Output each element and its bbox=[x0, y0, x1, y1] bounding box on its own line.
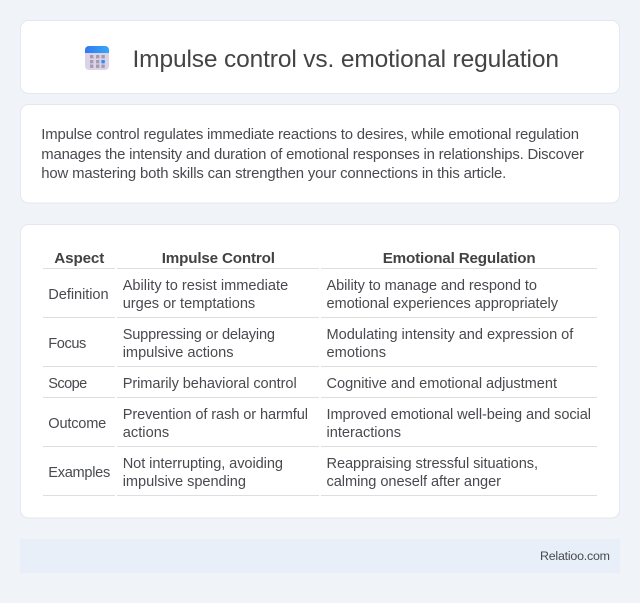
table row: definition: Ability to manage and respond to bbox=[326, 278, 537, 294]
table row: definition: Ability to resist immediate bbox=[123, 278, 288, 294]
table row: outcome: actions bbox=[123, 425, 169, 441]
table row: examples: Examples bbox=[48, 465, 110, 481]
footer bbox=[20, 539, 620, 573]
table row: examples: Not interrupting, avoiding bbox=[123, 456, 283, 472]
footer text: Relatioo.com bbox=[540, 549, 610, 563]
panel: title card bbox=[20, 20, 620, 94]
icon: calendar bbox=[85, 46, 109, 70]
text block: introduction: how mastering both skills can strengthen your connections in this article. bbox=[41, 166, 506, 182]
table row: scope bbox=[48, 376, 557, 392]
table row: definition bbox=[48, 278, 559, 312]
table header: Aspect bbox=[54, 250, 104, 267]
title: Impulse control vs. emotional regulation bbox=[132, 46, 559, 73]
table row: focus: Focus bbox=[48, 336, 86, 352]
table row: outcome: interactions bbox=[326, 425, 401, 441]
text block: introduction: Impulse control regulates immediate reactions to desires, while emotional regulation bbox=[41, 127, 579, 143]
table row: scope: Scope bbox=[48, 376, 87, 392]
table row: focus: Modulating intensity and expression of bbox=[326, 327, 574, 343]
table header bbox=[54, 250, 536, 267]
table row: examples bbox=[48, 456, 538, 490]
table row: outcome bbox=[48, 407, 591, 441]
table header: Emotional Regulation bbox=[383, 250, 536, 267]
text block: introduction bbox=[41, 127, 584, 182]
table row: examples: calming oneself after anger bbox=[326, 474, 501, 490]
table row: focus: Suppressing or delaying bbox=[123, 327, 275, 343]
table row: outcome: Prevention of rash or harmful bbox=[123, 407, 308, 423]
table row: outcome: Outcome bbox=[48, 416, 106, 432]
table row: focus bbox=[48, 327, 574, 361]
panel: introduction bbox=[20, 104, 620, 203]
table row: focus: impulsive actions bbox=[123, 345, 234, 361]
table row: examples: Reappraising stressful situations, bbox=[326, 456, 538, 472]
table row: scope: Cognitive and emotional adjustment bbox=[326, 376, 557, 392]
table row: focus: emotions bbox=[326, 345, 386, 361]
table row: outcome: Improved emotional well-being and social bbox=[326, 407, 591, 423]
panel: comparison table bbox=[20, 224, 620, 518]
text block: introduction: manages the intensity and duration of emotional responses in relationships. Discover bbox=[41, 147, 584, 163]
table row: definition: emotional experiences appropriately bbox=[326, 296, 559, 312]
table row: definition: Definition bbox=[48, 287, 109, 303]
table row: scope: Primarily behavioral control bbox=[123, 376, 297, 392]
table row: definition: urges or temptations bbox=[123, 296, 255, 312]
table header: Impulse Control bbox=[162, 250, 275, 267]
table row: examples: impulsive spending bbox=[123, 474, 246, 490]
